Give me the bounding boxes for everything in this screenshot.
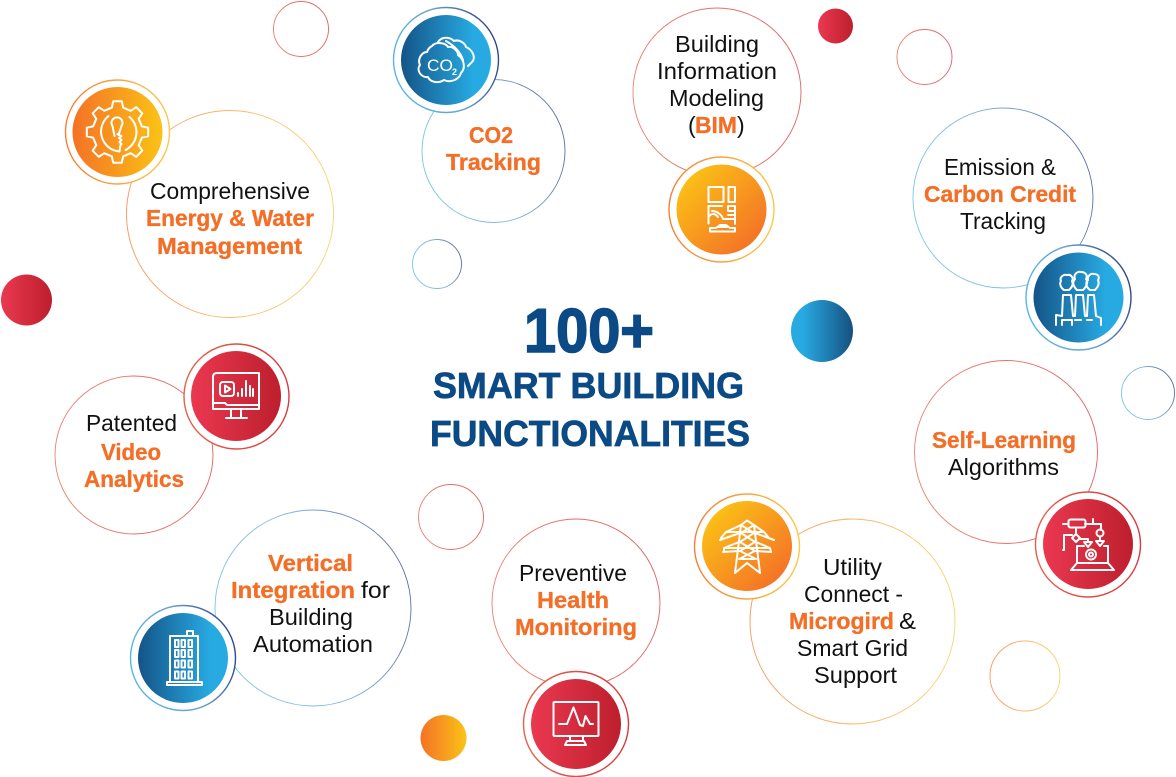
text: vertical integration [231,550,390,657]
decorative outline circle top right [897,30,952,84]
text: CO2 tracking: Tracking [446,149,541,175]
icon: factory emissions [1026,245,1131,350]
text: video analytics: Analytics [84,466,184,492]
text: emission and carbon credit: Tracking [960,208,1046,234]
text: energy and water: Management [157,233,302,259]
text: video analytics: Video [101,439,161,465]
text: self-learning algorithms: Algorithms [948,454,1059,480]
panel: preventive health monitoring [492,519,660,776]
icon: office building [130,606,236,710]
text: BIM: ( [688,112,696,138]
text: video analytics: Patented [86,410,177,436]
text: energy and water: Comprehensive [150,178,310,204]
text: video analytics [84,410,184,492]
icon: CO2 clouds: CO [427,56,453,75]
text: vertical integration: Automation [253,631,373,657]
text: BIM: ) [737,112,745,138]
icon: gear with bulb [66,80,170,184]
icon: video monitor [184,344,289,449]
text: utility connect: Microgird [789,608,894,634]
central title: FUNCTIONALITIES [430,413,750,454]
decorative blue dot [791,300,853,362]
panel: patented video analytics [55,344,289,534]
decorative orange dot [420,715,466,761]
panel: utility connect [694,494,955,724]
decorative outline circle centre left [412,240,462,288]
text: utility connect: Utility [823,554,883,580]
text: preventive health: Health [537,587,609,613]
decorative red dot top [818,8,853,44]
text: utility connect: Smart Grid [797,635,908,661]
text: preventive health [515,560,637,640]
text: BIM: Modeling [669,85,764,111]
text: self-learning algorithms [932,427,1076,480]
panel: vertical integration for building automation [130,510,411,710]
text: vertical integration: Vertical [268,550,353,576]
icon: laptop flowchart [1036,492,1140,597]
icon: transmission tower [694,494,800,599]
decorative outline circle top [274,2,328,56]
panel: building information modeling [633,8,801,262]
text: energy and water [146,178,314,259]
text: vertical integration: Integration [231,577,355,603]
text: utility connect: Connect - [804,581,903,607]
decorative red dot left [1,274,52,326]
text: utility connect: & [899,608,916,634]
text: preventive health: Preventive [519,560,627,586]
text: vertical integration: Building [269,604,353,630]
text: emission and carbon credit [924,154,1076,234]
text: CO2 tracking: CO2 [469,122,513,148]
text: BIM [657,31,777,138]
text: utility connect [789,554,916,688]
panel: energy and water management [66,80,334,318]
icon: CO2 clouds: 2 [452,67,457,77]
icon: health monitor [524,672,628,776]
text: BIM: Information [657,58,777,84]
text: emission and carbon credit: Carbon Credit [924,181,1076,207]
decorative outline circle lower right [990,641,1060,711]
decorative outline circle right [1122,366,1174,420]
text: energy and water: Energy & Water [146,205,314,231]
central title [430,297,750,454]
text: emission and carbon credit: Emission & [944,154,1056,180]
panel: emission and carbon credit tracking [913,108,1131,350]
central title: 100+ [524,297,654,366]
text: self-learning algorithms: Self-Learning [932,427,1076,453]
panel: CO2 tracking [394,8,565,222]
decorative outline circle lower centre [418,484,484,550]
icon: CO2 clouds [394,8,498,112]
panel: self-learning algorithms [914,360,1140,597]
icon: BIM plan [669,157,774,262]
text: utility connect: Support [814,662,898,688]
text: BIM: Building [675,31,759,57]
text: vertical integration: for [361,577,390,603]
central title: SMART BUILDING [433,365,744,406]
text: CO2 tracking [446,122,541,175]
text: BIM: BIM [695,112,737,138]
text: preventive health: Monitoring [515,614,637,640]
